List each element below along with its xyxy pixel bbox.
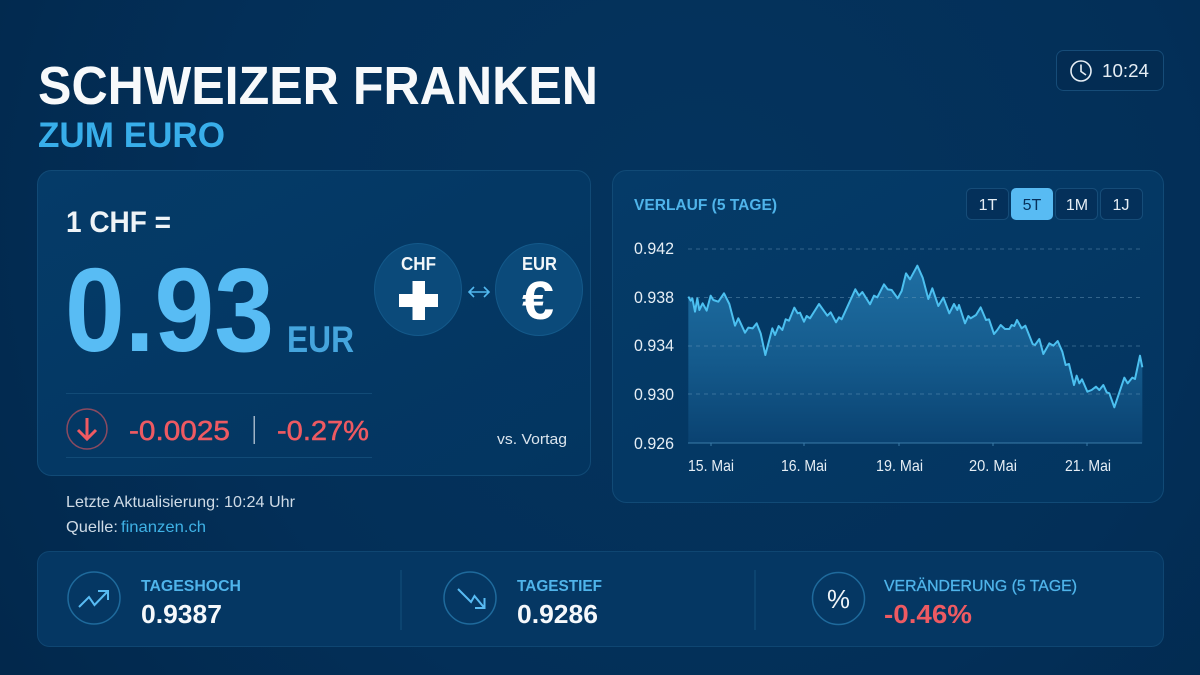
rate label: 1 CHF = (66, 206, 171, 239)
stat: daily low (444, 572, 602, 629)
daily change (129, 415, 369, 446)
stat: daily high: 0.9387 (141, 599, 222, 629)
x axis labels: 16. Mai (781, 458, 827, 475)
daily change: -0.27% (277, 415, 369, 446)
x axis labels: 15. Mai (688, 458, 734, 475)
update and source note: Letzte Aktualisierung: 10:24 Uhr (66, 494, 296, 511)
y axis labels: 0.938 (634, 288, 674, 307)
update and source note (66, 494, 296, 536)
range buttons: 1M (1066, 197, 1088, 214)
y axis labels (634, 239, 674, 453)
EUR badge: EUR (522, 254, 557, 274)
CHF badge (374, 244, 462, 336)
rate unit: EUR (287, 319, 354, 360)
y axis labels: 0.926 (634, 434, 674, 453)
update and source note: Quelle: (66, 519, 118, 536)
stat: daily high: TAGESHOCH (141, 578, 241, 595)
stat: five day change: -0.46% (884, 599, 972, 629)
stat: daily low: TAGESTIEF (517, 578, 602, 595)
range buttons: 1J (1113, 197, 1129, 214)
range buttons (966, 188, 1142, 220)
stat: daily low: 0.9286 (517, 599, 598, 629)
rate value: 0.93 (65, 244, 274, 377)
exchange arrow (469, 287, 489, 297)
daily change: -0.0025 (129, 415, 230, 446)
stat: daily high (68, 572, 241, 629)
clock badge (1056, 50, 1164, 90)
stat: five day change (812, 572, 1077, 629)
line chart (688, 249, 1142, 446)
panel: chart (612, 170, 1164, 502)
EUR badge: € (522, 271, 554, 331)
x axis labels: 20. Mai (969, 458, 1017, 475)
clock badge: 10:24 (1102, 61, 1149, 81)
panel: daily stats (38, 552, 1164, 646)
y axis labels: 0.942 (634, 239, 674, 258)
x axis labels: 19. Mai (876, 458, 923, 475)
stat: five day change: % (827, 584, 850, 614)
chart heading: VERLAUF (5 TAGE) (634, 197, 777, 214)
x axis labels: 21. Mai (1065, 458, 1111, 475)
x axis labels (688, 458, 1111, 475)
CHF badge: CHF (401, 254, 436, 274)
y axis labels: 0.930 (634, 385, 674, 404)
stat: five day change: VERÄNDERUNG (5 TAGE) (884, 577, 1077, 595)
title: ZUM EURO (38, 116, 225, 155)
icon: down arrow (67, 409, 107, 449)
panel: current rate (38, 170, 590, 476)
range buttons: 1T (979, 197, 998, 214)
comparison note: vs. Vortag (497, 431, 567, 448)
title (38, 56, 598, 155)
title: SCHWEIZER FRANKEN (38, 56, 598, 116)
range buttons: 5T (1023, 197, 1042, 214)
update and source note: finanzen.ch (121, 519, 206, 536)
EUR badge (496, 244, 582, 336)
y axis labels: 0.934 (634, 336, 674, 355)
